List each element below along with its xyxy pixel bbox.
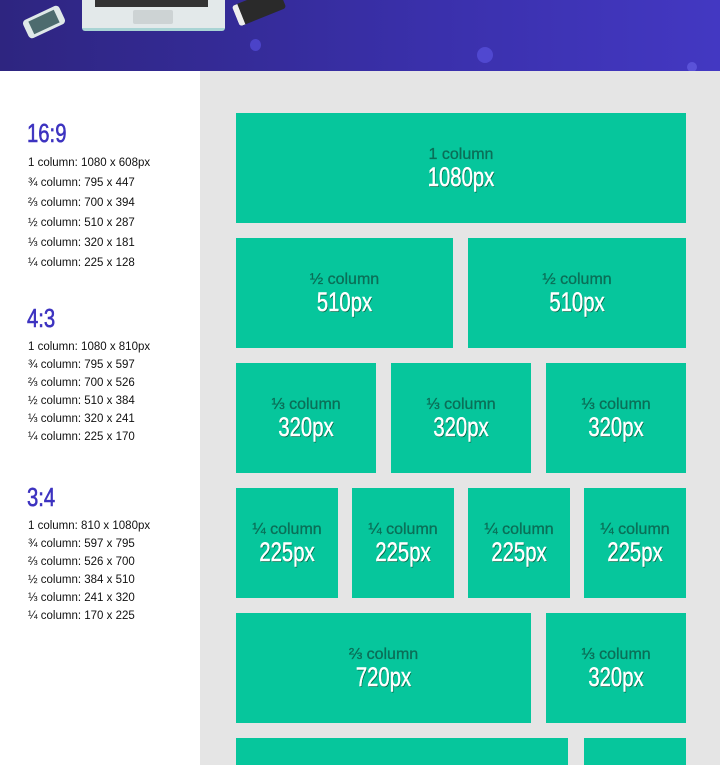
box: third	[391, 363, 531, 473]
box: quarter: 225px	[607, 537, 663, 567]
text: ¾ column: 795 x 597	[28, 359, 135, 371]
box: two-thirds: ⅔ column	[349, 646, 418, 663]
box: third: 320px	[588, 662, 644, 692]
box: quarter: 225px	[259, 537, 315, 567]
box: quarter: 225px	[375, 537, 431, 567]
icon: notebook	[232, 0, 286, 27]
text: 1 column: 810 x 1080px	[28, 520, 150, 532]
box: quarter partial	[584, 738, 686, 765]
box: third: ⅓ column	[581, 396, 651, 413]
panel: 3:4 sizes: 3:4	[27, 482, 55, 512]
text: ⅔ column: 700 x 394	[28, 197, 135, 209]
box: quarter: ¼ column	[252, 521, 322, 538]
text: ⅓ column: 320 x 181	[28, 237, 135, 249]
text: ⅓ column: 320 x 241	[28, 413, 135, 425]
box: half: ½ column	[310, 271, 379, 288]
box: 1 column: 1 column	[429, 146, 493, 163]
text: ⅔ column: 526 x 700	[28, 556, 135, 568]
box: third: ⅓ column	[581, 646, 651, 663]
text: ⅓ column: 241 x 320	[28, 592, 135, 604]
box: half: 510px	[317, 287, 372, 317]
text: ¾ column: 597 x 795	[28, 538, 135, 550]
text: 1 column: 1080 x 608px	[28, 157, 150, 169]
box: half	[468, 238, 686, 348]
box: half: ½ column	[542, 271, 612, 288]
text: ⅔ column: 700 x 526	[28, 377, 135, 389]
text: ¾ column: 795 x 447	[28, 177, 135, 189]
text: ¼ column: 170 x 225	[28, 610, 135, 622]
box: third: ⅓ column	[426, 396, 496, 413]
text: ¼ column: 225 x 128	[28, 257, 135, 269]
box: half	[236, 238, 453, 348]
text: ½ column: 384 x 510	[28, 574, 135, 586]
box: quarter	[236, 488, 338, 598]
decorative dots	[250, 39, 261, 51]
box: third: 320px	[588, 412, 644, 442]
box: 1 column	[236, 113, 686, 223]
text: 1 column: 1080 x 810px	[28, 341, 150, 353]
header banner	[0, 0, 720, 71]
box: third: ⅓ column	[271, 396, 341, 413]
panel: 4:3 sizes: 4:3	[27, 303, 55, 333]
box: third	[236, 363, 376, 473]
box: two-thirds	[236, 613, 531, 723]
text: ¼ column: 225 x 170	[28, 431, 135, 443]
panel: 16:9 sizes: 16:9	[27, 118, 66, 148]
box: third: 320px	[278, 412, 334, 442]
box: two-thirds: 720px	[356, 662, 411, 692]
box: three-quarter partial	[236, 738, 568, 765]
box: quarter	[468, 488, 570, 598]
box: third	[546, 613, 686, 723]
icon: phone	[22, 4, 66, 40]
text: ½ column: 510 x 287	[28, 217, 135, 229]
icon: laptop	[82, 0, 225, 31]
box: 1 column: 1080px	[428, 162, 494, 192]
box: quarter	[584, 488, 686, 598]
box: third	[546, 363, 686, 473]
box: quarter: ¼ column	[600, 521, 670, 538]
box: quarter: 225px	[491, 537, 547, 567]
box: quarter: ¼ column	[484, 521, 554, 538]
box: half: 510px	[549, 287, 605, 317]
text: ½ column: 510 x 384	[28, 395, 135, 407]
box: quarter: ¼ column	[368, 521, 438, 538]
box: third: 320px	[433, 412, 489, 442]
gray grid panel	[200, 71, 720, 765]
box: quarter	[352, 488, 454, 598]
